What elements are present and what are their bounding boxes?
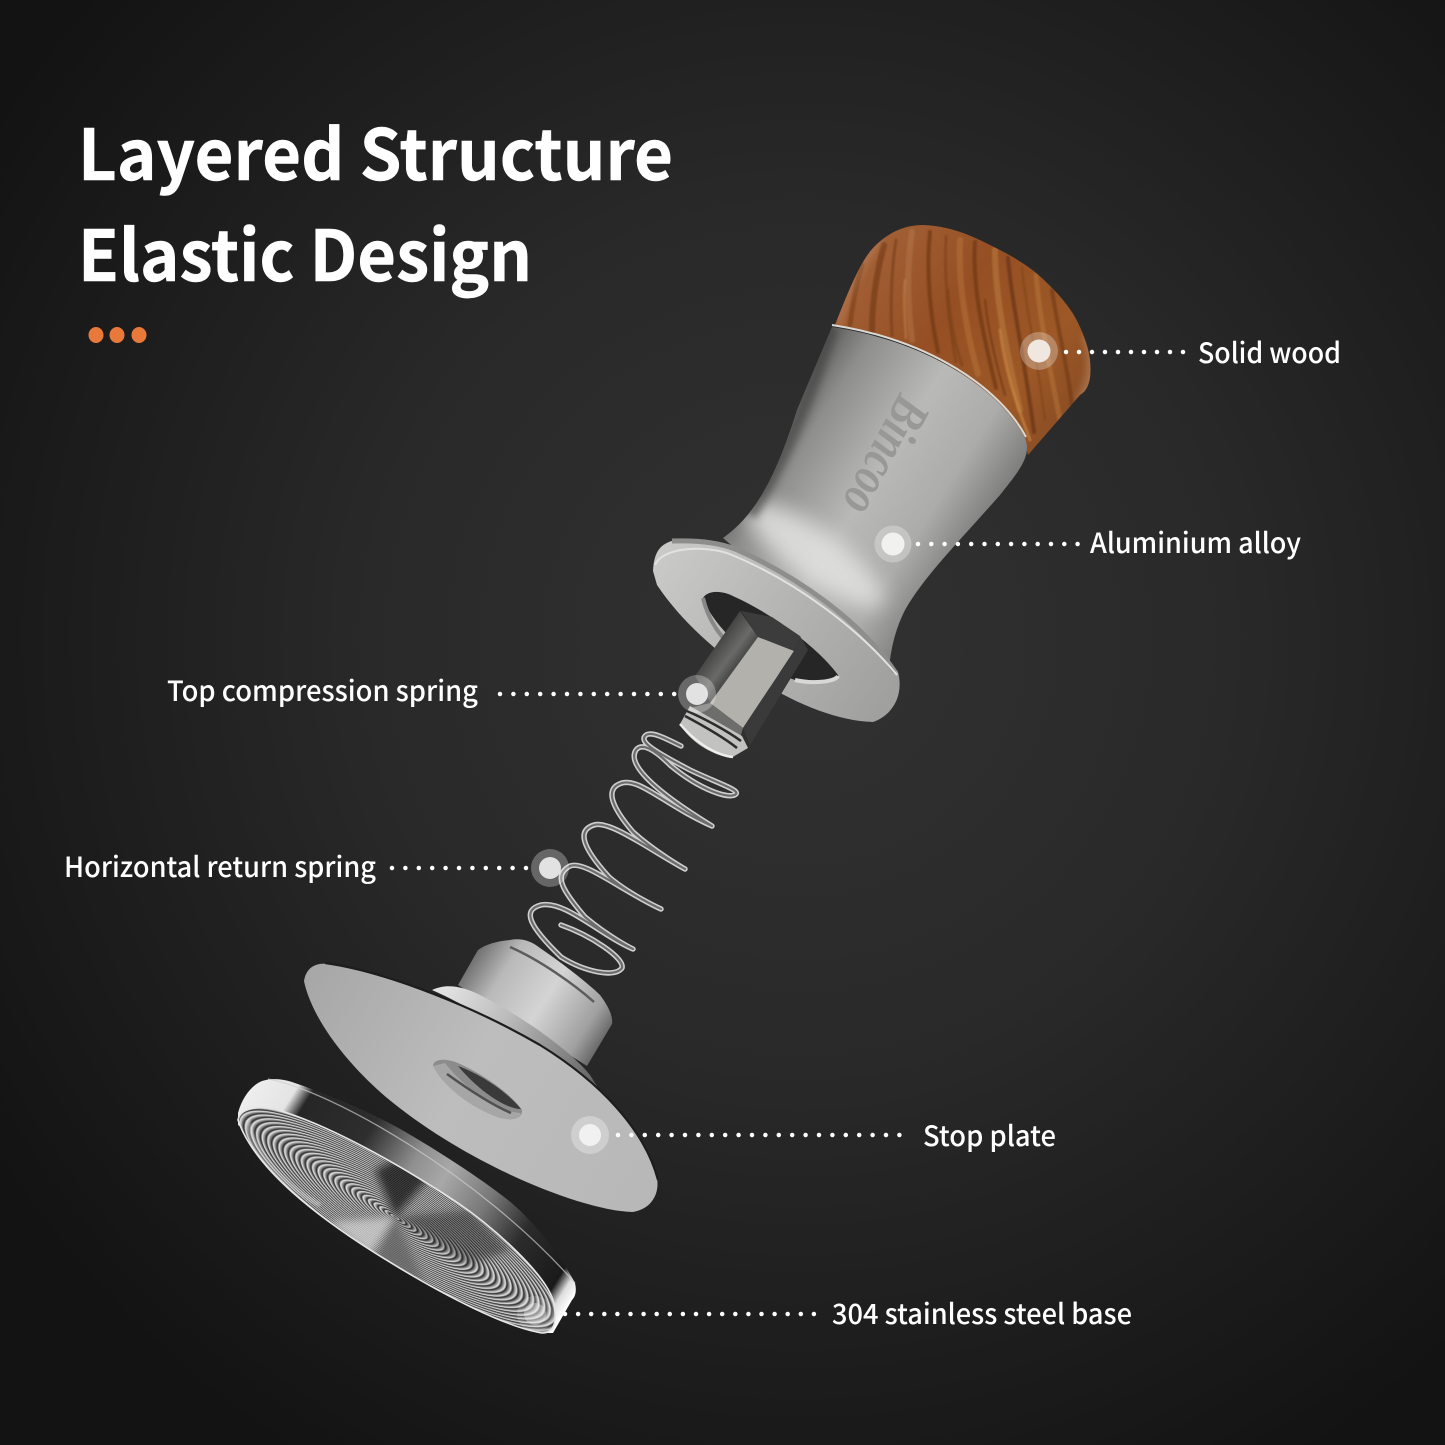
- bincoo logo: Bincoo: [830, 386, 943, 526]
- callout: horizontal return spring: Horizontal return spring: [64, 846, 376, 886]
- callout: 304 stainless steel base: 304 stainless steel base: [832, 1293, 1132, 1333]
- stop plate hole: [433, 1060, 522, 1119]
- stop plate neck: [458, 939, 612, 1066]
- callout: solid wood: Solid wood: [1198, 332, 1341, 372]
- callout: top compression spring: Top compression spring: [167, 670, 478, 710]
- callout: aluminium alloy: [874, 522, 1301, 562]
- title: Layered Structure: [78, 100, 673, 201]
- callout: stop plate: [571, 1115, 1056, 1155]
- tamper handle: aluminium body: [723, 325, 1027, 680]
- threaded shaft: [680, 611, 808, 758]
- callout: stop plate: Stop plate: [923, 1115, 1056, 1155]
- flange hole: [703, 592, 838, 682]
- base ridged face: [238, 1108, 554, 1332]
- callout: 304 stainless steel base: [517, 1293, 1132, 1333]
- callout: aluminium alloy: Aluminium alloy: [1090, 522, 1301, 562]
- stainless steel base: [237, 1078, 576, 1334]
- orange dots accent: [88, 327, 146, 343]
- callout: top compression spring: [167, 670, 716, 713]
- title: [78, 100, 673, 302]
- callout: horizontal return spring: [64, 846, 569, 887]
- compression spring: [530, 734, 736, 973]
- stop plate: [304, 939, 658, 1212]
- title: Elastic Design: [78, 201, 532, 302]
- tamper handle: flange with hole: [653, 540, 900, 722]
- tamper handle: wood knob: [835, 225, 1090, 455]
- callout: solid wood: [1020, 332, 1341, 372]
